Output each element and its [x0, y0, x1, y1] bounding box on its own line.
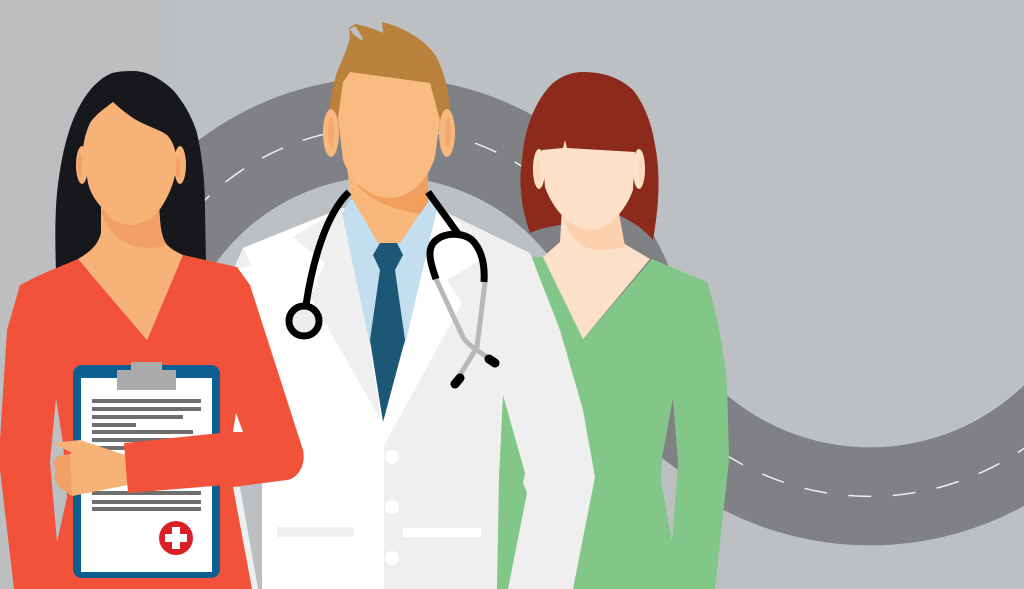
black hair	[55, 71, 206, 272]
neck and chest	[543, 208, 650, 339]
arm gap	[661, 398, 678, 542]
text lines	[92, 399, 201, 511]
neck shadow	[101, 205, 167, 248]
ears	[323, 109, 455, 157]
right lapel	[380, 208, 480, 453]
pockets	[277, 527, 481, 537]
stethoscope	[289, 192, 495, 384]
neck shadow	[562, 208, 625, 250]
neck	[347, 165, 428, 243]
buttons	[385, 450, 399, 565]
neck and chest	[78, 205, 183, 340]
ears	[76, 146, 186, 184]
red hair	[520, 72, 659, 240]
figure: doctor	[233, 22, 595, 589]
coat right front and sleeve	[384, 208, 595, 589]
road: winding S-curve	[165, 127, 1024, 496]
green scrubs	[490, 257, 729, 589]
red cross badge	[159, 521, 193, 555]
clipboard	[73, 362, 220, 578]
tie	[370, 243, 405, 422]
left lapel	[293, 208, 381, 420]
face	[83, 102, 176, 225]
face	[542, 140, 635, 230]
forearm sleeve	[124, 430, 304, 493]
orange scrubs	[0, 255, 304, 589]
coat left front	[233, 208, 437, 589]
coat gap	[233, 470, 262, 589]
ears	[533, 149, 645, 189]
figure: nurse in green	[490, 72, 729, 589]
neck shadow	[357, 172, 428, 214]
side gaps	[50, 398, 67, 542]
figure: nurse with clipboard	[0, 71, 304, 589]
shoulder fold	[233, 248, 252, 270]
shirt collar	[342, 200, 438, 345]
hand	[53, 440, 128, 496]
hair	[329, 22, 450, 122]
clip	[117, 362, 176, 390]
face	[338, 72, 440, 198]
